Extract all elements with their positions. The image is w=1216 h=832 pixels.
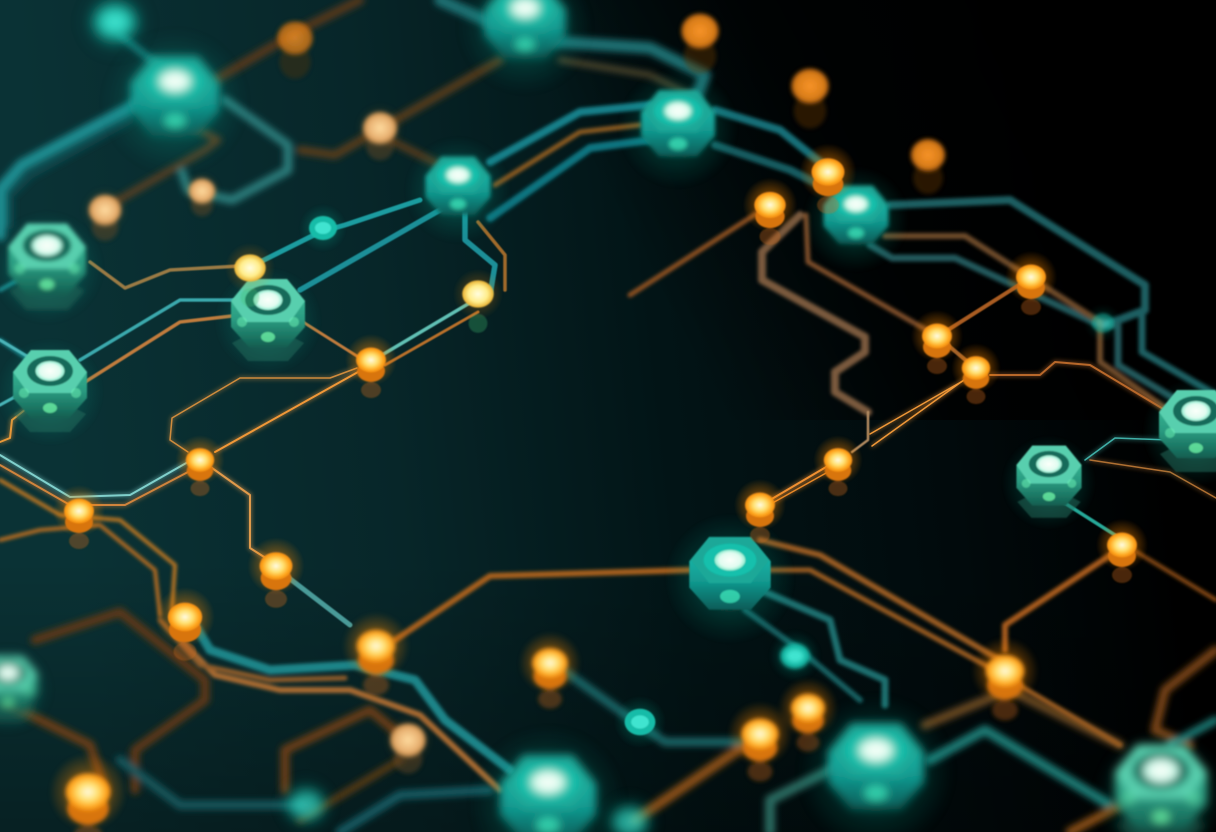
dot: [728, 702, 792, 782]
yellow dot: [453, 269, 503, 333]
amber dot: [277, 21, 313, 79]
dot: [778, 678, 838, 752]
dot: [53, 485, 105, 549]
yellow dot: [225, 243, 275, 307]
pale dot: [81, 186, 129, 241]
node upper right: [803, 166, 909, 272]
node upper centre: [618, 68, 738, 188]
node bottom centre: [470, 726, 626, 832]
dot: [175, 435, 225, 496]
dot: [743, 178, 797, 245]
dot: [971, 637, 1039, 720]
dot: [911, 310, 963, 374]
teal dot lower: [614, 696, 666, 748]
node lower centre-right: [798, 694, 954, 832]
node left green: [0, 211, 104, 324]
dot: [155, 587, 215, 661]
dot: [734, 479, 786, 543]
glowing orange dots: [53, 143, 1148, 661]
teal dot mid: [299, 204, 347, 252]
dot: [49, 753, 127, 832]
pale dot bottom centre: [599, 791, 661, 832]
far amber dots: [81, 14, 945, 774]
dark upper-right falloff: [0, 0, 1216, 420]
traces: glowing thin lines: [0, 362, 1216, 562]
dot: [813, 435, 863, 496]
dot: [345, 334, 397, 398]
node right: [1001, 435, 1097, 530]
node top left large: [103, 30, 247, 174]
traces: sharp centre: [0, 195, 1115, 625]
node far right: [1142, 378, 1216, 486]
teal dot top left: [79, 0, 151, 58]
teal dot lower right: [770, 631, 820, 681]
node centre left: [214, 267, 322, 375]
node centre bottom: [664, 513, 796, 645]
amber dot: [791, 68, 829, 128]
grey-teal dot right: [1084, 304, 1122, 342]
pale dot: [355, 103, 405, 160]
dot: [342, 612, 410, 695]
node small upper: [405, 137, 511, 243]
node top centre: [459, 0, 591, 93]
pale dot bottom: [275, 774, 337, 832]
node left: [0, 338, 104, 446]
pale dot lower: [382, 714, 434, 774]
dot: [1096, 519, 1148, 583]
dot: [247, 537, 305, 608]
node bottom right: [1094, 730, 1216, 832]
dot: [519, 632, 581, 709]
amber dot: [681, 14, 719, 74]
node left edge: [0, 646, 51, 733]
dot: [1005, 251, 1057, 315]
dot: [951, 343, 1001, 404]
pale dot: [182, 171, 222, 216]
amber dot: [911, 139, 945, 194]
dot: [799, 143, 857, 214]
